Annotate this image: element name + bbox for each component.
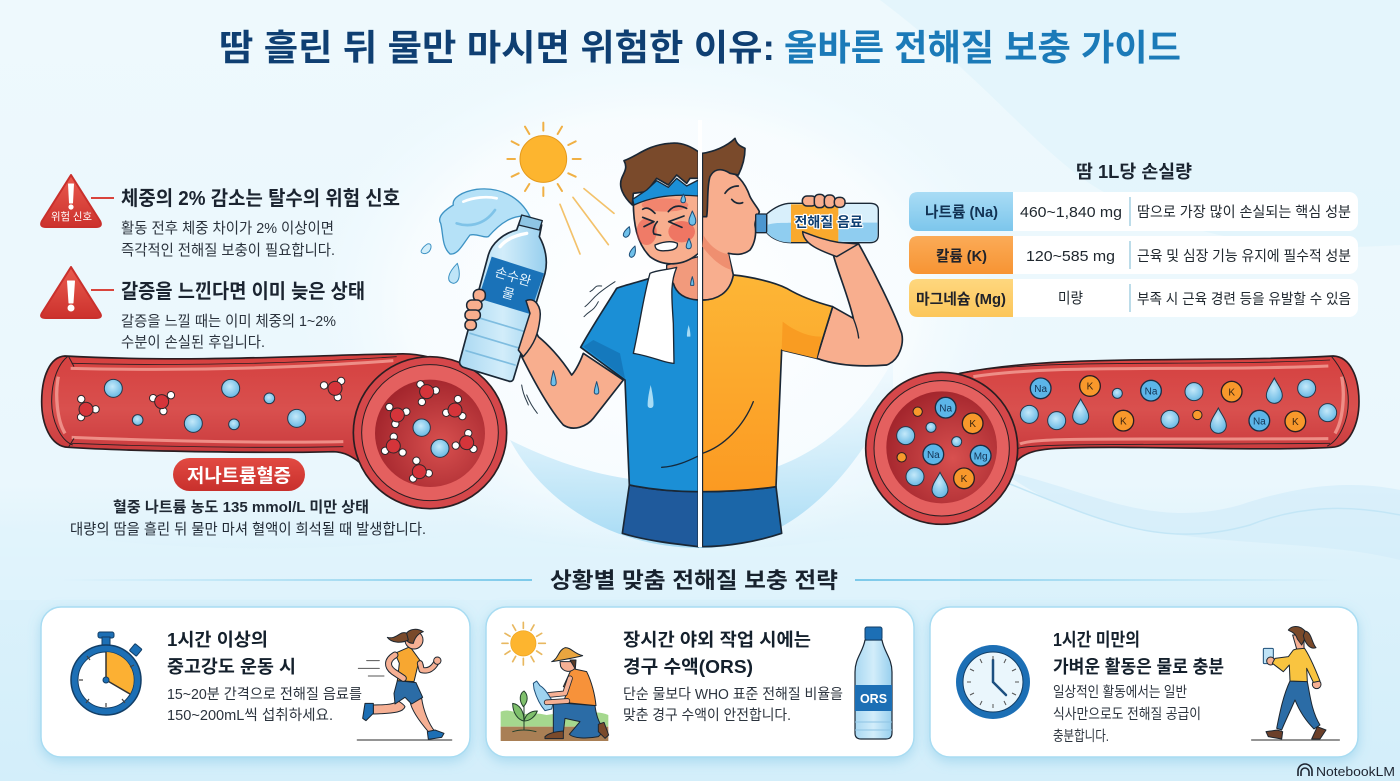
- potassium badges: K: [1087, 382, 1094, 393]
- left person: shirt: [581, 278, 698, 492]
- right person: shirt: [702, 275, 833, 492]
- potassium badges: [954, 376, 1306, 489]
- icon: warning triangle: 위험 신호: [51, 210, 92, 223]
- title: 땀 흘린 뒤 물만 마시면 위험한 이유:: [219, 27, 775, 68]
- divider: center: [698, 120, 702, 547]
- label: hyponatremia: [173, 458, 305, 491]
- heading: 1시간 미만의: [1053, 630, 1140, 650]
- row: sodium: 나트륨 (Na): [925, 204, 998, 221]
- panel: light activity: [930, 607, 1358, 757]
- row: magnesium: 부족 시 근육 경련 등을 유발할 수 있음: [1137, 291, 1351, 308]
- potassium badges: K: [1228, 387, 1235, 398]
- icon: warning triangle: [41, 267, 114, 318]
- text block: hyponatremia: 대량의 땀을 흘린 뒤 물만 마셔 혈액이 희석될 때 발생합니다.: [70, 521, 426, 538]
- row: sodium: 460~1,840 mg: [1020, 204, 1122, 221]
- row: sodium: [909, 192, 1358, 231]
- potassium badges: K: [1292, 417, 1299, 428]
- icon: stopwatch: [71, 632, 142, 715]
- table title: 땀 1L당 손실량: [1076, 162, 1192, 182]
- icon: water bottle: [460, 215, 546, 381]
- bottle label: 전해질 음료: [794, 214, 863, 230]
- icon: water splash: [440, 189, 530, 254]
- sodium badges: Mg: [974, 451, 988, 462]
- text block: 15~20분 간격으로 전해질 음료를: [167, 686, 362, 703]
- right hand: [802, 194, 858, 257]
- left person: towel: [633, 267, 677, 363]
- electrolyte bubbles: [897, 379, 1337, 486]
- motion lines: [522, 282, 615, 413]
- text block: 갈증을 느낄 때는 이미 체중의 1~2%: [121, 313, 336, 330]
- heading: 1시간 이상의: [167, 630, 268, 650]
- sodium badges: Na: [1034, 384, 1047, 395]
- text block: 식사만으로도 전해질 공급이: [1053, 706, 1201, 723]
- left person: neck: [667, 257, 698, 302]
- text block: hyponatremia: 혈중 나트륨 농도 135 mmol/L 미만 상태: [113, 499, 369, 516]
- water molecules: [71, 372, 484, 489]
- row: magnesium: 마그네슘 (Mg): [916, 291, 1006, 308]
- sodium badges: Na: [1145, 386, 1158, 397]
- icon: electrolyte bottle: [756, 203, 878, 243]
- text block: 즉각적인 전해질 보충이 필요합니다.: [121, 242, 335, 259]
- title: 올바른 전해질 보충 가이드: [784, 27, 1181, 68]
- right person: head: [702, 167, 759, 300]
- row: magnesium: [909, 279, 1358, 317]
- table: sweat loss: [909, 162, 1358, 317]
- text block: 맞춘 경구 수액이 안전합니다.: [623, 707, 791, 724]
- sodium badges: Na: [939, 403, 952, 414]
- left blood vessel: [42, 354, 507, 509]
- right blood vessel: [866, 356, 1359, 524]
- left person: arm: [520, 327, 623, 428]
- sweat drops: [551, 194, 696, 408]
- panel: exercise: [41, 607, 470, 757]
- text block: 활동 전후 체중 차이가 2% 이상이면: [121, 220, 334, 237]
- potassium badges: K: [969, 419, 976, 430]
- sodium badges: Na: [1253, 416, 1266, 427]
- water bubbles: [104, 379, 449, 457]
- text block: 충분합니다.: [1053, 728, 1109, 745]
- row: potassium: 근육 및 심장 기능 유지에 필수적 성분: [1137, 248, 1351, 265]
- water drops: [932, 378, 1282, 498]
- text block: 단순 물보다 WHO 표준 전해질 비율을: [623, 686, 843, 703]
- warning 1: [41, 175, 400, 259]
- right person: arm: [803, 233, 902, 366]
- sodium badges: [923, 378, 1270, 466]
- icon: clock: [956, 645, 1030, 719]
- text block: 150~200mL씩 섭취하세요.: [167, 707, 333, 724]
- text block: 일상적인 활동에서는 일반: [1053, 684, 1187, 701]
- row: potassium: [909, 236, 1358, 274]
- right person: hair: [702, 138, 745, 217]
- icon: walking woman: [1252, 626, 1339, 740]
- icon: ORS bottle: [855, 627, 892, 739]
- logo: NotebookLM: NotebookLM: [1316, 764, 1395, 779]
- left person: hair and headband: [621, 143, 698, 205]
- row: sodium: 땀으로 가장 많이 손실되는 핵심 성분: [1137, 204, 1351, 221]
- bottle label: 손수완: [493, 264, 533, 289]
- heading: 경구 수액(ORS): [623, 657, 753, 677]
- panel: outdoor work: [486, 607, 914, 757]
- heading: 체중의 2% 감소는 탈수의 위험 신호: [121, 187, 400, 210]
- left hand: [465, 289, 540, 357]
- warning 2: [41, 267, 365, 351]
- bottle label: [488, 264, 533, 306]
- central figure: [421, 123, 902, 547]
- row: potassium: 칼륨 (K): [936, 248, 987, 265]
- text block: 수분이 손실된 후입니다.: [121, 334, 265, 351]
- right person: pants: [702, 487, 782, 547]
- sodium badges: Na: [927, 450, 940, 461]
- row: magnesium: 미량: [1058, 290, 1083, 307]
- icon: runner: [357, 629, 452, 740]
- heading: 가벼운 활동은 물로 충분: [1053, 657, 1224, 677]
- potassium badges: K: [1120, 416, 1127, 427]
- bottle label: 물: [500, 285, 516, 303]
- icon: farmer: [501, 622, 609, 741]
- heading: 장시간 야외 작업 시에는: [623, 630, 811, 650]
- potassium badges: K: [961, 474, 968, 485]
- label: hyponatremia: 저나트륨혈증: [187, 465, 291, 487]
- icon: ORS bottle: ORS: [860, 692, 887, 706]
- left person: face: [633, 185, 698, 264]
- section heading: 상황별 맞춤 전해질 보충 전략: [550, 568, 838, 593]
- heading: 중고강도 운동 시: [167, 657, 296, 677]
- left person: pants: [622, 485, 698, 547]
- icon: sun: [507, 123, 614, 254]
- heading: 갈증을 느낀다면 이미 늦은 상태: [121, 280, 365, 303]
- row: potassium: 120~585 mg: [1026, 248, 1115, 265]
- icon: warning triangle: [41, 175, 114, 227]
